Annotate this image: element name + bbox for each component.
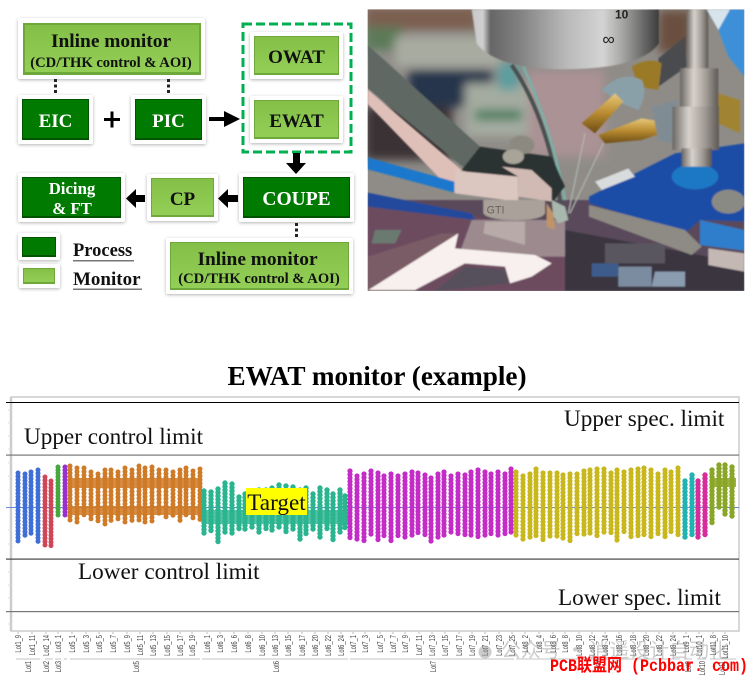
axis ticks bbox=[8, 410, 11, 624]
x axis lot group labels: Lot3 bbox=[55, 661, 63, 672]
x axis lot group labels: Lot10 bbox=[699, 661, 707, 675]
x axis wafer labels: Lot8_22 bbox=[656, 635, 664, 656]
EIC box bbox=[18, 95, 93, 144]
x axis wafer labels: Lot8_10 bbox=[576, 635, 584, 656]
x axis wafer labels: Lot8_18 bbox=[630, 635, 638, 656]
data series: Lot 7 bbox=[350, 469, 511, 543]
x axis wafer labels: Lot5_7 bbox=[110, 635, 118, 653]
x axis wafer labels: Lot8_2 bbox=[522, 635, 530, 653]
x axis wafer labels: Lot6_6 bbox=[231, 635, 239, 653]
x axis wafer labels: Lot7_25 bbox=[509, 635, 517, 656]
x axis wafer labels: Lot6_13 bbox=[272, 635, 280, 656]
x axis wafer labels: Lot5_3 bbox=[83, 635, 91, 653]
x axis lot group labels: Lot6 bbox=[273, 661, 281, 672]
EIC box: EIC bbox=[39, 111, 72, 132]
inline monitor box top bbox=[18, 18, 205, 79]
data series: Lot 5 bbox=[68, 466, 202, 524]
x axis wafer labels: Lot7_5 bbox=[377, 635, 385, 653]
holder logo: GTI bbox=[487, 204, 504, 216]
photo: wafer probing station: ∞ bbox=[602, 29, 615, 49]
data series: Lot 4 bbox=[62, 467, 68, 515]
dashed wafer acceptance test group bbox=[243, 24, 351, 152]
x axis lot group labels bbox=[25, 661, 727, 675]
data series: Lot 9 bbox=[685, 475, 692, 540]
label: target: Target bbox=[247, 490, 306, 516]
x axis wafer labels: Lot7_3 bbox=[362, 635, 370, 653]
dotted connectors bbox=[56, 79, 296, 238]
CP box: CP bbox=[170, 189, 196, 210]
Dicing and FT box: Dicing bbox=[49, 179, 96, 198]
x axis wafer labels: Lot6_1 bbox=[204, 635, 212, 653]
x axis wafer labels: Lot5_1 bbox=[69, 635, 77, 653]
x axis wafer labels: Lot5_17 bbox=[177, 635, 185, 656]
chart: EWAT monitor bbox=[6, 397, 739, 675]
x axis wafer labels: Lot5_11 bbox=[137, 635, 145, 655]
x axis wafer labels: Lot7_9 bbox=[402, 635, 410, 653]
x axis lot group labels: Lot2 bbox=[43, 661, 51, 672]
x axis lot group labels: Lot1 bbox=[25, 661, 33, 672]
x axis wafer labels: Lot6_3 bbox=[217, 635, 225, 653]
x axis wafer labels: Lot11_10 bbox=[722, 635, 730, 659]
label: lower control limit: Lower control limit bbox=[78, 559, 260, 585]
label: upper control limit: Upper control limit bbox=[24, 424, 204, 450]
x axis wafer labels: Lot8_24 bbox=[670, 635, 678, 656]
x axis wafer labels: Lot2_14 bbox=[43, 635, 51, 656]
legend bbox=[18, 233, 142, 290]
data series: Lot 1 bbox=[18, 470, 38, 544]
inline monitor box bottom: (CD/THK control & AOI) bbox=[178, 271, 340, 287]
data series: Lot 10 bbox=[698, 475, 705, 540]
x axis wafer labels: Lot9_1 bbox=[683, 635, 691, 653]
legend: Monitor bbox=[73, 269, 141, 290]
inline monitor box top: (CD/THK control & AOI) bbox=[30, 55, 192, 71]
x axis wafer labels: Lot8_20 bbox=[643, 635, 651, 656]
x axis wafer labels: Lot8_12 bbox=[589, 635, 597, 656]
x axis wafer labels: Lot5_19 bbox=[189, 635, 197, 656]
x axis wafer labels: Lot1_11 bbox=[29, 635, 37, 655]
arrow: PIC to EWAT bbox=[209, 111, 240, 127]
x axis wafer labels: Lot7_21 bbox=[482, 635, 490, 656]
x axis wafer labels: Lot7_7 bbox=[390, 635, 398, 653]
x axis wafer labels: Lot7_19 bbox=[469, 635, 477, 656]
x axis tick marks bbox=[18, 632, 725, 634]
x axis wafer labels: Lot8_6 bbox=[550, 635, 558, 653]
target line bbox=[6, 507, 739, 508]
Dicing and FT box bbox=[18, 173, 125, 222]
x axis wafer labels bbox=[15, 635, 730, 659]
EWAT box: EWAT bbox=[269, 111, 324, 132]
x axis wafer labels: Lot7_17 bbox=[456, 635, 464, 656]
photo: wafer probing station bbox=[365, 7, 745, 291]
arrow: COUPE to CP bbox=[218, 189, 238, 208]
OWAT box bbox=[250, 32, 343, 79]
x axis wafer labels: Lot7_11 bbox=[416, 635, 424, 655]
x axis lot group brackets bbox=[16, 658, 736, 660]
OWAT box: OWAT bbox=[268, 47, 325, 68]
x axis wafer labels: Lot6_8 bbox=[245, 635, 253, 653]
x axis wafer labels: Lot6_20 bbox=[312, 635, 320, 656]
lower spec limit line bbox=[6, 611, 739, 612]
data series: Lot 11 bbox=[710, 465, 736, 525]
x axis wafer labels: Lot7_1 bbox=[350, 635, 358, 653]
x axis lot group labels: Lot5 bbox=[133, 661, 141, 672]
x axis lot group labels: Lot7 bbox=[430, 661, 438, 672]
curved probe bbox=[512, 65, 562, 213]
plot frame bbox=[11, 397, 739, 631]
wafer surface bbox=[368, 9, 745, 291]
objective marking: 10 bbox=[615, 7, 629, 21]
lower control limit line bbox=[6, 558, 739, 560]
data series: Lot 3 bbox=[56, 467, 60, 515]
x axis wafer labels: Lot6_22 bbox=[325, 635, 333, 656]
x axis wafer labels: Lot6_17 bbox=[299, 635, 307, 656]
inline monitor box bottom: Inline monitor bbox=[197, 249, 318, 270]
x axis wafer labels: Lot8_14 bbox=[602, 635, 610, 656]
COUPE box: COUPE bbox=[262, 189, 331, 210]
x axis wafer labels: Lot8_16 bbox=[616, 635, 624, 656]
inline monitor box top: Inline monitor bbox=[51, 31, 171, 52]
label: upper spec limit: Upper spec. limit bbox=[564, 406, 725, 432]
label: lower spec limit: Lower spec. limit bbox=[558, 585, 721, 611]
COUPE box bbox=[239, 173, 354, 222]
x axis lot group labels: Lot8 bbox=[595, 661, 603, 672]
plus sign bbox=[104, 112, 120, 128]
x axis lot group labels: Lot11 bbox=[719, 661, 727, 675]
Dicing and FT box: & FT bbox=[52, 199, 92, 218]
CP box bbox=[147, 174, 218, 221]
chart title: EWAT monitor (example) bbox=[227, 361, 527, 391]
legend: Process bbox=[73, 241, 132, 261]
upright steel tube and fitting bbox=[687, 9, 708, 69]
x axis lot group labels: Lot9 bbox=[685, 661, 693, 672]
data series: Lot 2 bbox=[45, 477, 51, 548]
EWAT box bbox=[250, 96, 343, 143]
x axis wafer labels: Lot7_23 bbox=[496, 635, 504, 656]
x axis wafer labels: Lot8_4 bbox=[536, 635, 544, 653]
left arm and blue tube bbox=[368, 45, 480, 168]
brass nozzles and knurled knobs bbox=[658, 37, 687, 87]
arrow: EWAT to COUPE bbox=[286, 153, 306, 174]
PIC box: PIC bbox=[152, 111, 185, 132]
x axis wafer labels: Lot5_15 bbox=[164, 635, 172, 656]
x axis wafer labels: Lot10_1 bbox=[696, 635, 704, 656]
x axis wafer labels: Lot7_13 bbox=[429, 635, 437, 656]
inline monitor box bottom bbox=[166, 238, 353, 294]
upper spec limit line bbox=[6, 402, 739, 403]
lens barrel bbox=[472, 9, 659, 69]
x axis wafer labels: Lot11_8 bbox=[710, 635, 718, 655]
arrow: CP to Dicing bbox=[126, 189, 145, 208]
data series: Lot 8 bbox=[516, 468, 678, 544]
PIC box bbox=[131, 95, 206, 144]
watermark: account name: 公众号 · 逍遥设计自动化 bbox=[501, 634, 729, 663]
x axis wafer labels: Lot1_9 bbox=[15, 635, 23, 653]
x axis wafer labels: Lot5_9 bbox=[124, 635, 132, 653]
x axis wafer labels: Lot5_13 bbox=[150, 635, 158, 656]
x axis wafer labels: Lot3_1 bbox=[55, 635, 63, 653]
data series: Lot 6 bbox=[202, 483, 348, 543]
upper control limit line bbox=[6, 454, 739, 456]
x axis wafer labels: Lot5_5 bbox=[96, 635, 104, 653]
x axis wafer labels: Lot6_15 bbox=[285, 635, 293, 656]
x axis wafer labels: Lot6_10 bbox=[259, 635, 267, 656]
process flow diagram bbox=[18, 18, 354, 294]
blue block bbox=[589, 143, 744, 233]
x axis wafer labels: Lot7_15 bbox=[442, 635, 450, 656]
x axis wafer labels: Lot8_8 bbox=[562, 635, 570, 653]
x axis wafer labels: Lot6_24 bbox=[338, 635, 346, 656]
